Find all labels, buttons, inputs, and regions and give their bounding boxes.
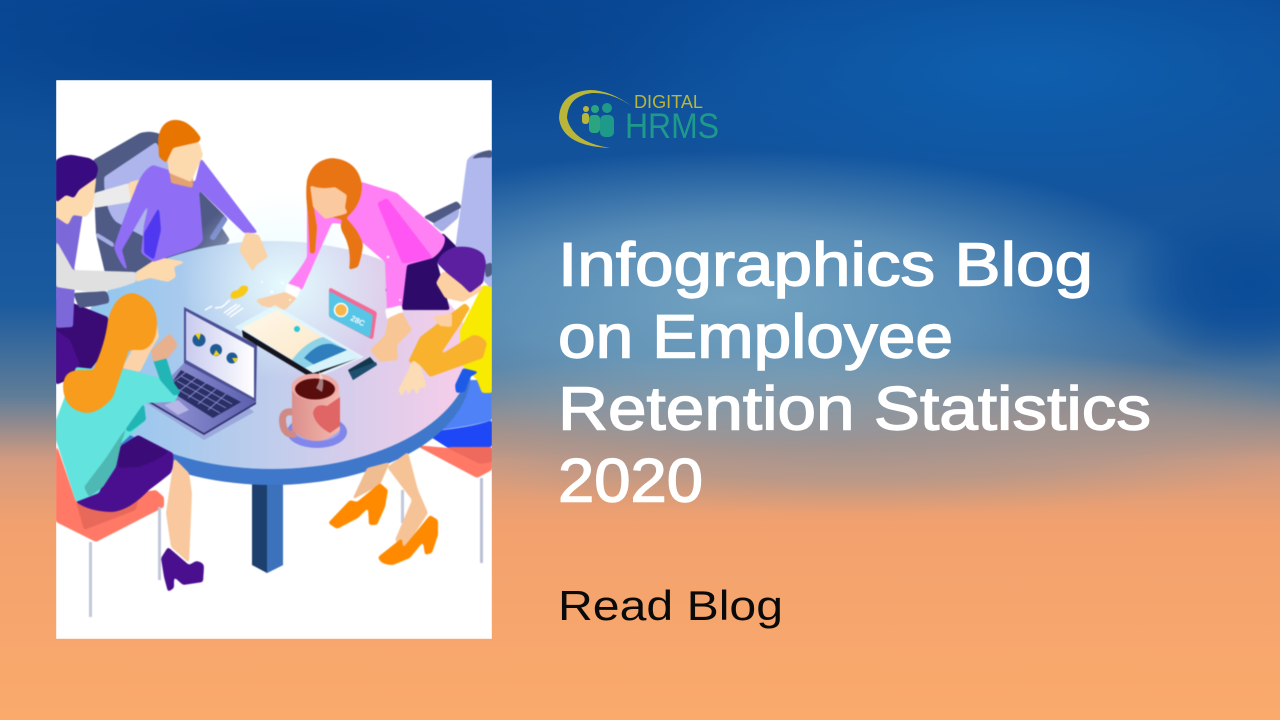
right girl skirt and seat behind table — [415, 380, 492, 478]
call to action: read blog: Read Blog — [558, 582, 783, 629]
logo: Digital HRMS — [559, 90, 719, 148]
logo people — [582, 103, 614, 137]
title — [558, 230, 1151, 514]
title: Infographics Blog — [558, 230, 1093, 298]
laptop — [146, 307, 257, 440]
icon: small data cloud — [205, 286, 248, 317]
right chair legs — [401, 478, 483, 563]
person: orange-haired man — [114, 120, 268, 272]
legs and orange shoes — [328, 452, 438, 565]
person: pink woman — [255, 158, 457, 362]
sparkles — [261, 256, 401, 301]
coffee mug — [282, 370, 347, 448]
widget: temperature card: 28C — [349, 314, 366, 328]
widget: temperature card — [329, 287, 377, 340]
logo wordmark digital: DIGITAL — [634, 92, 703, 112]
person: left man — [56, 155, 186, 385]
table — [73, 190, 471, 573]
panel: illustration — [56, 80, 492, 639]
chair behind orange-haired man — [93, 132, 230, 277]
person: orange chair woman — [56, 293, 204, 592]
icon: black router — [348, 357, 377, 380]
logo crescent — [559, 90, 633, 148]
front chair legs — [89, 507, 161, 617]
fingers on shoulder — [138, 186, 160, 205]
title: on Employee — [558, 302, 953, 370]
tablet — [235, 305, 364, 379]
logo wordmark hrms: HRMS — [625, 107, 719, 146]
person: right girl — [398, 247, 492, 397]
chair right — [423, 150, 492, 290]
title: 2020 — [558, 446, 703, 514]
pie charts on laptop — [192, 333, 238, 364]
title: Retention Statistics — [558, 374, 1151, 442]
